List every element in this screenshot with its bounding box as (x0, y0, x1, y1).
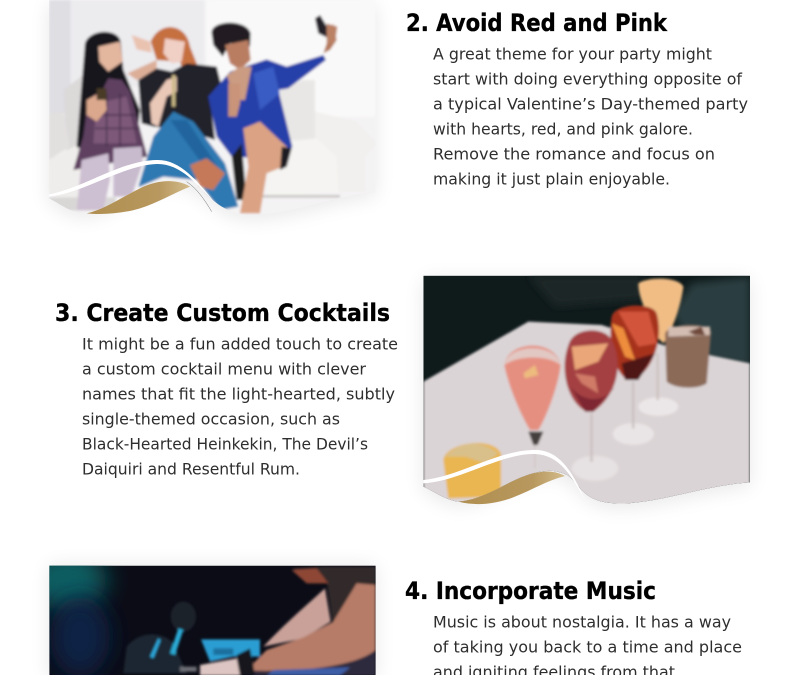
text block: section 3 body: Black-Hearted Heinkekin, The Devil’s (82, 434, 368, 454)
gold swoosh (87, 181, 190, 214)
text block: section 3 body: Daiquiri and Resentful Rum. (82, 460, 300, 478)
white swoosh (49, 160, 217, 205)
text block: section 4 body: Music is about nostalgia. It has a way (433, 612, 731, 632)
heading: 2. Avoid Red and Pink: 2. Avoid Red and Pink (406, 9, 668, 37)
text block: section 4 body (433, 612, 742, 675)
text block: section 2 body: with hearts, red, and pink galore. (433, 120, 693, 138)
text block: section 3 body: a custom cocktail menu with clever (82, 360, 366, 378)
heading: 4. Incorporate Music: 4. Incorporate Music (405, 577, 656, 605)
photo: friends taking a selfie on a white sofa (49, 0, 377, 219)
text block: section 2 body: a typical Valentine’s Day-themed party (433, 94, 748, 114)
gold swoosh (458, 471, 565, 504)
text block: section 3 body: single-themed occasion, such as (82, 410, 340, 428)
text block: section 3 body: It might be a fun added touch to create (82, 334, 398, 354)
text block: section 4 body: of taking you back to a time and place (433, 638, 742, 656)
heading: 3. Create Custom Cocktails: 3. Create Custom Cocktails (55, 299, 390, 327)
photo: DJ at a mixing deck (46, 562, 379, 675)
white swoosh (423, 450, 585, 500)
text block: section 2 body (433, 44, 748, 188)
photo: four cocktails on a white table (423, 276, 750, 510)
text block: section 3 body: names that fit the light-hearted, subtly (82, 384, 395, 404)
text block: section 2 body: making it just plain enjoyable. (433, 170, 670, 188)
text block: section 3 body (82, 334, 398, 478)
text block: section 2 body: Remove the romance and focus on (433, 144, 715, 164)
text block: section 2 body: start with doing everything opposite of (433, 70, 742, 88)
text block: section 2 body: A great theme for your party might (433, 44, 712, 64)
